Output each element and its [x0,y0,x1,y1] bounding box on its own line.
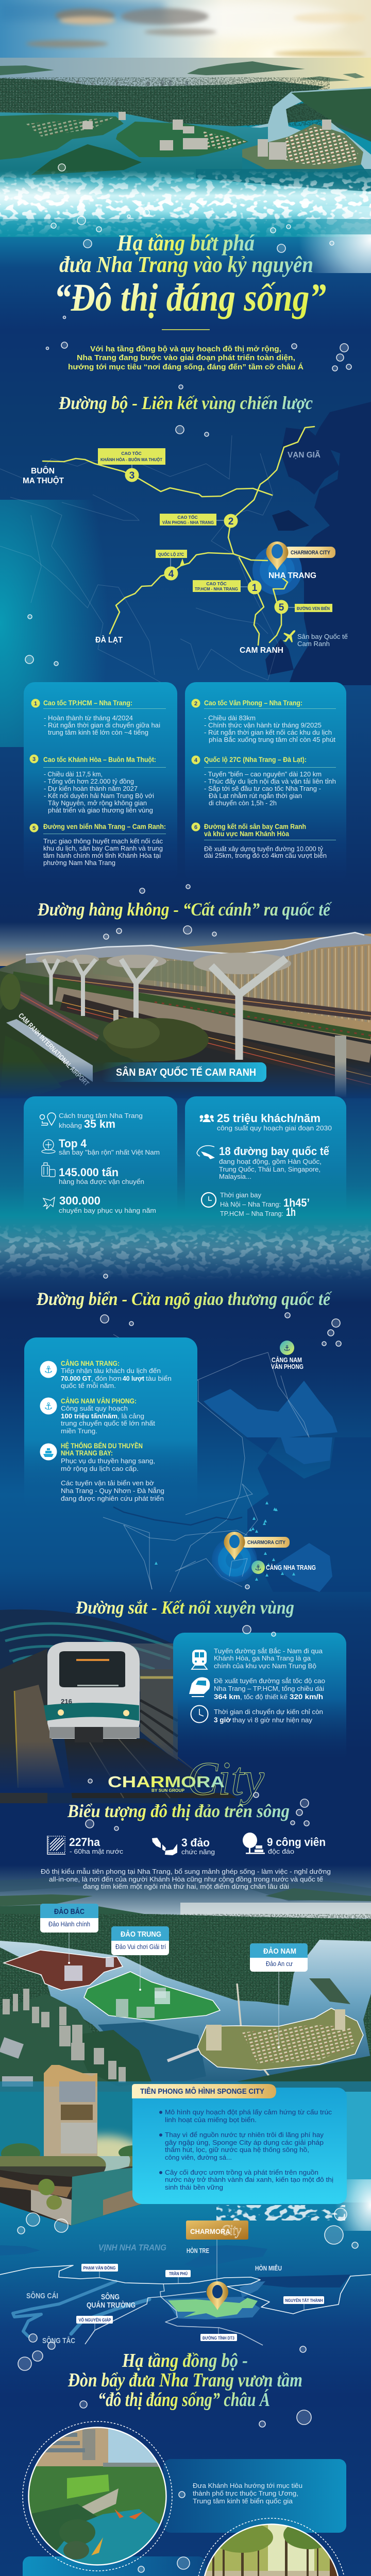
marker 2: 2 [228,516,233,527]
island plan [168,2298,258,2317]
item 1: 1 [34,701,37,707]
icon: plane [283,630,295,642]
place names: SÔNG TẮC [42,2336,75,2345]
pin: Charmora City: CHARMORA CITY [291,550,331,556]
item 4: 4 [194,757,198,764]
item 3 [30,754,166,814]
small port triangles [155,1501,295,1581]
heading: conclusion: “đô thị đáng sống” châu Á [98,2389,270,2411]
item 4: - Thúc đẩy du lịch nội địa và vận tải liên tỉnh [204,778,336,785]
panel: goal 2 card [23,2556,206,2576]
panel: rail card: thay vì 8 giờ như hiện nay [232,1717,313,1724]
port: Nha Trang Bay: Phục vụ du thuyền hạng sang, [61,1458,155,1465]
label: đường ven biển: ĐƯỜNG VEN BIỂN [297,605,330,611]
port: Nha Trang: tàu biển [146,1375,172,1382]
marker 2 [216,514,238,528]
panel: rail card: chính của khu vực Nam Trung Bộ [214,1663,316,1670]
item 1: trung tâm kinh tế lớn còn ~4 tiếng [48,729,148,736]
item 3: - Dự kiến hoàn thành năm 2027 [44,785,138,792]
place names: HÒN TRE [187,2247,209,2255]
port: Nha Trang: CẢNG NHA TRANG: [61,1360,120,1367]
port: Nha Trang [40,1360,172,1389]
panel: airport stats right: Hà Nội – Nha Trang: [220,1201,281,1208]
photo circle 1: riverside park [23,2421,172,2571]
stat: islands [152,1836,215,1856]
road 1: TP.HCM - Nha Trang [239,557,264,645]
stat: area [47,1836,124,1855]
icon: airport badge [42,1140,55,1153]
panel: airport stats left: 145.000 tấn [59,1166,119,1179]
coastal routes note [61,1480,164,1502]
place names [23,449,348,655]
item 4: - Tuyến “biển – cao nguyên” dài 120 km [204,771,322,778]
panel: goal 1 card [163,2459,346,2533]
logo: Charmora City [108,1752,264,1805]
intro text: hướng tới mục tiêu “nơi đáng sống, đáng đến” tầm cỡ châu Á [68,363,304,371]
coastal routes note: đang được nghiên cứu phát triển [61,1495,164,1502]
road 5: ven biển [269,579,288,642]
panel: goal 1 card: thành phố trực thuộc Trung Ương, [193,2489,298,2497]
item 6: Đường kết nối sân bay Cam Ranh [204,823,306,831]
panel: rail card: Nha Trang – TP.HCM, tổng chiều dài [214,1685,324,1692]
panel: airport stats right: Malaysia... [219,1173,251,1180]
coastal routes note: Nha Trang - Quy Nhơn - Đà Nẵng [61,1487,164,1495]
marker: Cảng Nha Trang: ⚓ [255,1564,262,1572]
marker: Cảng Nam Vân Phong: ⚓ [283,1344,291,1353]
port: Nha Trang: Tiếp nhận tàu khách du lịch đến [61,1367,161,1375]
port: Nha Trang Bay: HỆ THỐNG BẾN DU THUYỀN [61,1442,143,1450]
panel: rail card: Tuyến đường sắt Bắc - Nam đi qua [214,1647,323,1655]
coastal routes note: Các tuyến vận tải biển ven bờ [61,1480,154,1487]
item 2 [192,699,336,743]
label: Đảo Bắc: Đảo Hành chính [48,1920,90,1928]
place names: HÒN MIỄU [255,2264,282,2272]
icon: plane swirl [197,1146,215,1159]
heading: conclusion: Hạ tầng đồng bộ - [122,2350,248,2371]
pin: Charmora City sea map [224,1532,290,1560]
title: “Đô thị đáng sống” [54,276,326,319]
paragraph: Charmora: all-in-one, là nơi đến của người Khánh Hòa cũng như cộng đồng trong nước và quốc tế [49,1876,323,1883]
panel: rail card: Khánh Hòa, ga Nha Trang là ga [214,1655,311,1662]
bullet 1: linh hoạt của miếng bọt biển. [165,2116,257,2124]
item 6: dài 25km, trong đó có 4km cầu vượt biển [204,852,327,859]
port: Nam Vân Phong: 100 triệu tấn/năm [61,1413,117,1420]
item 2: - Chiều dài 83km [204,715,256,722]
port: Nha Trang: , đón hơn [91,1375,122,1382]
panel: goal 1 card: Trung tâm kinh tế biển quốc gia [193,2497,293,2505]
road label: Võ Nguyên Giáp: VÕ NGUYÊN GIÁP [78,2317,111,2323]
item 2: - Rút ngắn thời gian kết nối các khu du lịch [204,728,332,736]
panel: airport stats right [185,1096,346,1220]
panel: airport stats left: Top 4 [59,1137,87,1150]
label: TP.HCM - Nha Trang: CAO TỐC [206,581,227,586]
bullet 1 [159,2108,332,2124]
item 4: Đà Lạt nhằm rút ngắn thời gian [209,792,302,800]
stats row [47,1833,326,1856]
label: TP.HCM - Nha Trang: TP.HCM - NHA TRANG [195,586,238,591]
road label: Nguyễn Tất Thành [283,2296,324,2310]
label: Đảo Nam [250,1943,308,1972]
panel: goal 1 card: Đưa Khánh Hòa hướng tới mục tiêu [193,2482,302,2489]
label: Vân Phong - Nha Trang [160,514,216,526]
place names: BUÔN [31,466,55,476]
item 5: tâm hành chính mới tỉnh Khánh Hòa tại [43,852,161,859]
item 1: - Hoàn thành từ tháng 4/2024 [44,715,133,722]
heading: air: Đường hàng không - “Cất cánh” ra quốc tế [37,899,332,920]
panel: rail card: , tốc độ thiết kế [240,1693,288,1701]
port: Nam Vân Phong [40,1397,156,1435]
port: Nha Trang: quốc tế mỗi năm. [61,1382,116,1389]
label: Khánh Hòa - Buôn Ma Thuột: CAO TỐC [121,450,142,456]
bullet 3: sinh thái bền vững [165,2183,223,2191]
stat: islands: 3 đảo [181,1836,210,1849]
panel: airport stats left: khoảng [59,1122,82,1129]
item 5: khu du lịch, sân bay Cam Ranh và trung [43,845,163,852]
logo: Charmora City: City [187,1752,264,1805]
icon: route pin [40,1113,56,1125]
heading: Charmora: Biểu tượng đô thị đảo trên sông [67,1801,290,1821]
item 3: Tây Nguyên, mở rộng không gian [48,800,147,807]
place names: QUÁN TRƯỜNG [87,2300,136,2310]
port: Nam Vân Phong: , là cảng [117,1413,144,1420]
road label: Võ Nguyên Giáp [76,2316,113,2330]
heading: road: Đường bộ - Liên kết vùng chiến lược [58,393,313,413]
logo: Charmora City: BY SUN GROUP [151,1788,185,1793]
road 2: Vân Phong - Nha Trang [228,427,314,561]
photo: metro train [0,1609,247,1803]
panel: sponge city [132,2084,347,2204]
heading: sea: Đường biển - Cửa ngõ giao thương quốc tế [36,1289,332,1309]
icon: clock [191,1705,208,1723]
label: airport name [102,1062,266,1082]
label: Đảo Nam: Đảo An cư [266,1960,293,1968]
item 5: phường Nam Nha Trang [43,859,115,867]
road map [0,402,371,747]
item 2: phía Bắc xuống trung tâm chỉ còn 45 phút [209,736,336,743]
item 6: và khu vực Nam Khánh Hòa [204,830,289,838]
port: Nha Trang: 40 lượt [123,1375,145,1382]
port: Nam Vân Phong: CẢNG NAM VÂN PHONG: [61,1397,137,1405]
item 4: - Sắp tới sẽ đầu tư cao tốc Nha Trang - [204,785,321,792]
item 4: Quốc lộ 27C (Nha Trang – Đà Lạt): [204,756,307,764]
panel: airport stats right: Thời gian bay [220,1192,262,1199]
port: Nha Trang: 70.000 GT [61,1375,91,1382]
icon: clock [201,1193,216,1207]
header: TIÊN PHONG MÔ HÌNH SPONGE CITY [140,2087,264,2096]
item 4: di chuyển còn 1,5h - 2h [209,800,277,807]
paragraph: Charmora: đang tìm kiếm một ngôi nhà thứ hai, một điểm dừng chân lâu dài [83,1883,289,1890]
panel: rail card: 3 giờ [214,1716,231,1724]
header [132,2084,276,2098]
roads [0,2265,371,2314]
bullet 2: gây ngập úng, Sponge City áp dụng các giải pháp [165,2139,324,2146]
item 6: 6 [194,824,197,831]
sea map [103,1334,371,1592]
logo: Charmora City: CHARMORA [108,1773,225,1791]
road label: Trần Phú: TRẦN PHÚ [169,2270,188,2276]
place names: ĐÀ LẠT [95,635,123,645]
panel: airport stats left: 300.000 [59,1194,100,1207]
bullet 3: Cây cối được ươm trồng và phát triển trên nguồn [165,2168,318,2176]
panel: airport stats right: công suất quy hoạch giai đoạn 2030 [217,1125,332,1132]
logo box: CHARMORA [190,2227,230,2235]
location map [0,2205,371,2345]
panel: airport stats right: TP.HCM – Nha Trang: [220,1210,283,1217]
port: Nam Vân Phong: Công suất quy hoạch [61,1405,128,1412]
photo: Charmora aerial with islands [0,1865,371,2112]
label: Đảo Bắc: ĐẢO BẮC [54,1907,85,1916]
photo: tower [1,2065,149,2164]
intro text: Nha Trang đang bước vào giai đoạn phát triển toàn diện, [77,354,295,362]
panel: rail card: Thời gian di chuyển dự kiến chỉ còn [214,1708,323,1716]
panel: rail card: Đề xuất tuyến đường sắt tốc độ cao [214,1677,325,1685]
bullet 3 [159,2168,333,2191]
place names [26,2243,282,2345]
item 2: - Chính thức vận hành từ tháng 9/2025 [204,722,322,729]
stat: parks [243,1833,326,1855]
place names: SÔNG [101,2292,120,2301]
label: airport name: SÂN BAY QUỐC TẾ CAM RANH [116,1066,256,1078]
icon: train front [192,1650,207,1669]
place names: VẠN GIÃ [288,449,321,460]
label: đường ven biển [295,604,332,612]
item 5: 5 [32,825,36,832]
title [54,230,326,319]
bullet 2: thẩm hút, lọc, giữ nước qua hệ thống sông hồ, [165,2146,309,2154]
icon: high-speed train [189,1677,210,1697]
road label: Nguyễn Tất Thành: NGUYỄN TẤT THÀNH [285,2297,323,2303]
item 5: Đường ven biển Nha Trang – Cam Ranh: [43,823,166,831]
panel: airport stats right: đang hoạt động, gồm Hàn Quốc, [219,1158,322,1165]
stat: islands: chức năng [181,1848,215,1856]
hero aerial photo [0,0,371,273]
panel: airport stats right: 1h45’ [283,1196,310,1209]
title: đưa Nha Trang vào kỷ nguyên [59,252,313,277]
icon: luggage [42,1163,55,1177]
label: Đảo Trung [111,1926,169,1955]
photo: Cam Ranh airport: CAM RANH INTERNATIONAL AIRPORT [17,1011,91,1088]
label: TP.HCM - Nha Trang [193,580,241,592]
place names: CAM RANH [240,646,283,655]
photo: metro train: 216 [61,1698,72,1705]
stat: parks: 9 công viên [267,1836,326,1849]
stat: area: 227ha [69,1836,100,1849]
logo box [186,2221,248,2240]
label: Khánh Hòa - Buôn Ma Thuột [98,448,165,465]
port: Nam Vân Phong: ⚓ [44,1401,53,1412]
connector lines [69,1933,70,1963]
item 1: Cao tốc TP.HCM – Nha Trang: [43,699,132,707]
place names: SÔNG CÁI [26,2291,58,2300]
panel: airport stats right: 1h [286,1206,296,1218]
marker: Cảng Nam Vân Phong: VÂN PHONG [271,1363,303,1370]
island: Đảo Bắc [4,1950,123,1990]
marker 4: 4 [168,569,174,580]
heading: rail: Đường sắt - Kết nối xuyên vùng [75,1597,294,1618]
port: Nam Vân Phong: trung chuyển quốc tế lớn nhất [61,1420,156,1427]
panel: rail card: 320 km/h [290,1692,323,1701]
panel: sea ports card [24,1337,197,1510]
road label: Phạm Văn Đồng: PHẠM VĂN ĐỒNG [83,2265,116,2270]
paragraph: Charmora [41,1868,331,1890]
panel: airport stats left: Cách trung tâm Nha Trang [59,1112,143,1120]
item 3: phát triển và giao thương liên vùng [48,807,153,814]
item 3: - Kết nối duyên hải Nam Trung Bộ với [44,792,154,800]
island: Đảo Trung [84,1972,220,2021]
label: Vân Phong - Nha Trang: CAO TỐC [177,514,198,520]
marker: Cảng Nha Trang: CẢNG NHA TRANG [266,1564,316,1571]
item 6 [192,822,336,859]
panel: airport stats left: 35 km [84,1117,115,1130]
panel: airport stats left: hàng hóa được vận chuyển [59,1178,144,1185]
label: quốc lộ 27C [156,550,187,558]
item 2: 2 [194,701,197,707]
panel: airport stats left [24,1096,177,1220]
port: Nam Vân Phong: miền Trung. [61,1428,97,1435]
road label: đường tỉnh DT3 [200,2328,237,2341]
panel: rail card [173,1633,346,1765]
bullet 3: nước này trở thành vành đai xanh, kiến tạo một đô thị [165,2176,333,2183]
marker 5: 5 [279,602,284,613]
road label: Trần Phú [165,2270,191,2283]
pin: Charmora City [266,541,335,570]
panel: airport stats right: 25 triệu khách/năm [217,1112,321,1125]
road 3: Khánh Hòa - Buôn Ma Thuột [43,459,272,497]
place names: Sân bay Quốc tế [297,633,348,640]
heading: conclusion: Đòn bẩy đưa Nha Trang vươn tầm [68,2369,302,2391]
marker 1 [241,580,262,595]
item 5: Trục giao thông huyết mạch kết nối các [43,838,163,845]
road 4: quốc lộ 27C [110,553,233,634]
port: Nha Trang Bay: NHA TRANG BAY: [61,1449,113,1457]
port: Nha Trang Bay: mở rộng du lịch cao cấp. [61,1465,139,1472]
sponge section water [0,2092,371,2231]
marker 3: 3 [129,470,134,481]
label: Đảo Bắc [40,1904,98,1933]
port: Nha Trang Bay [40,1442,155,1472]
item 6: Đề xuất xây dựng tuyến đường 10.000 tỷ [204,845,324,853]
bullet 2 [159,2131,324,2161]
panel: airport stats right: 18 đường bay quốc tế [219,1145,330,1158]
label: quốc lộ 27C: QUỐC LỘ 27C [158,551,184,557]
panel: airport stats left: sân bay "bận rộn" nhất Việt Nam [59,1149,160,1156]
item 5 [30,823,166,867]
item 4 [192,755,336,807]
stat: parks: độc đáo [268,1848,294,1855]
marker 3 [125,465,139,482]
road label: đường tỉnh DT3: ĐƯỜNG TỈNH DT3 [203,2335,234,2341]
heading: conclusion [68,2350,302,2411]
item 1: - Rút ngắn thời gian di chuyển giữa hai [44,721,160,729]
stat: area: - 60ha mặt nước [70,1848,124,1855]
panel: airport stats right: Trung Quốc, Thái Lan, Singapore, [219,1166,321,1173]
panel: rail card: 364 km [214,1692,240,1701]
bullet 2: Thay vì để nguồn nước tự nhiên trôi đi lãng phí hay [165,2131,324,2139]
marker: Cảng Nha Trang [251,1561,316,1574]
paragraph: Charmora: Đô thị kiểu mẫu tiên phong tại Nha Trang, bổ sung mảnh ghép sống - làm việc - nghỉ dưỡng [41,1868,331,1875]
marker: Cảng Nam Vân Phong [271,1341,303,1370]
place names: VỊNH NHA TRANG [98,2243,166,2252]
rivers [13,2281,149,2336]
item 3: - Tổng vốn hơn 22.000 tỷ đồng [44,778,134,785]
marker 4 [164,558,178,580]
icon: people [200,1114,214,1122]
item 3: - Chiều dài 117,5 km, [44,771,103,778]
place names: NHA TRANG [268,571,316,580]
port: Nha Trang: ⚓ [44,1365,53,1376]
photo circle 2: forest park [197,2518,346,2576]
road label: Phạm Văn Đồng [81,2264,118,2278]
label: Đảo Nam: ĐẢO NAM [263,1947,296,1956]
item 3: Cao tốc Khánh Hòa – Buôn Ma Thuột: [43,756,156,764]
photo: soil cross-section block [0,2156,150,2228]
photo: Cam Ranh airport [0,922,371,1098]
intro text [68,345,304,371]
marker 5 [274,600,295,614]
pin: Charmora City location [207,2281,228,2310]
bullet 2: công viên, đường sá... [165,2154,232,2161]
place names: Cam Ranh [297,640,330,648]
island: Đảo Nam [197,2008,363,2070]
label: Khánh Hòa - Buôn Ma Thuột: KHÁNH HÒA - BUÔN MA THUỘT [100,456,163,462]
bullet 1: Mô hình quy hoạch đột phá lấy cảm hứng từ cấu trúc [165,2108,332,2116]
marker: Cảng Nam Vân Phong: CẢNG NAM [272,1356,302,1364]
panel: road cards right [185,682,346,883]
label: Vân Phong - Nha Trang: VÂN PHONG - NHA TRANG [162,519,214,525]
item 3: 3 [32,756,36,762]
label: Đảo Trung: Đảo Vui chơi Giải trí [115,1943,166,1951]
place names: MA THUỘT [23,476,64,485]
marker 1: 1 [252,583,258,594]
panel: airport stats left: chuyến bay phục vụ hàng năm [59,1207,156,1214]
intro text: Với hạ tầng đồng bộ và quy hoạch đô thị mở rộng, [90,345,281,353]
title: Hạ tầng bứt phá [116,230,255,256]
item 2: Cao tốc Vân Phong – Nha Trang: [204,699,302,707]
logo box: City [222,2223,241,2239]
icon: plane outline [43,1197,55,1209]
item 1 [31,699,166,736]
panel: road cards left [24,682,177,883]
label: Đảo Trung: ĐẢO TRUNG [121,1930,161,1939]
pin: Charmora City sea map: CHARMORA CITY [247,1540,285,1546]
